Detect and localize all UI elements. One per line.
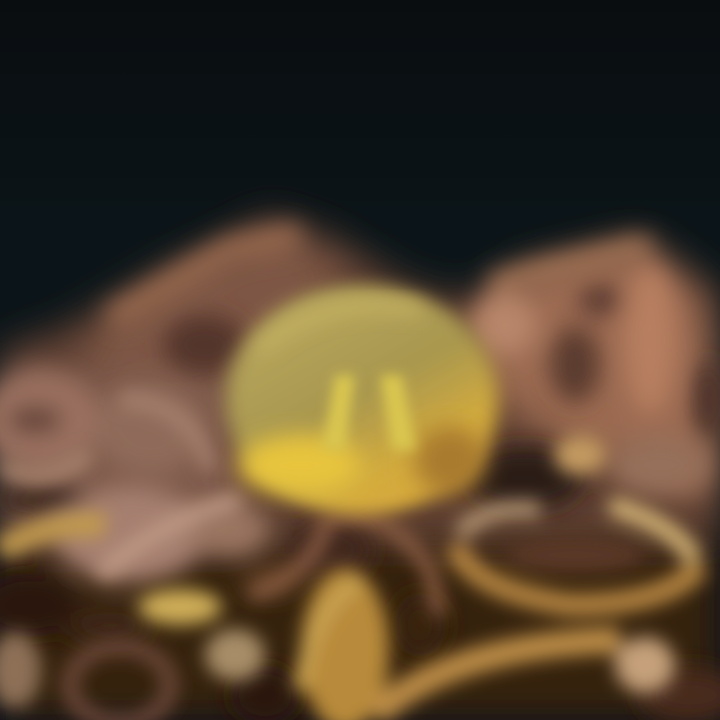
coin pile: front gold coins	[0, 400, 700, 720]
left gold edges	[0, 524, 105, 550]
central gold coin	[226, 285, 498, 515]
coin symbol	[322, 375, 416, 450]
coin body	[226, 285, 498, 515]
coin rim highlight top	[260, 307, 420, 350]
coin shadow lower right	[414, 426, 486, 494]
coin pile: mottled highlights and shadows	[0, 235, 720, 720]
coin pile: back mounds	[0, 215, 720, 720]
bottom gold coin	[301, 568, 389, 720]
coin glow lower left	[238, 435, 362, 495]
right coin ring	[455, 545, 700, 605]
